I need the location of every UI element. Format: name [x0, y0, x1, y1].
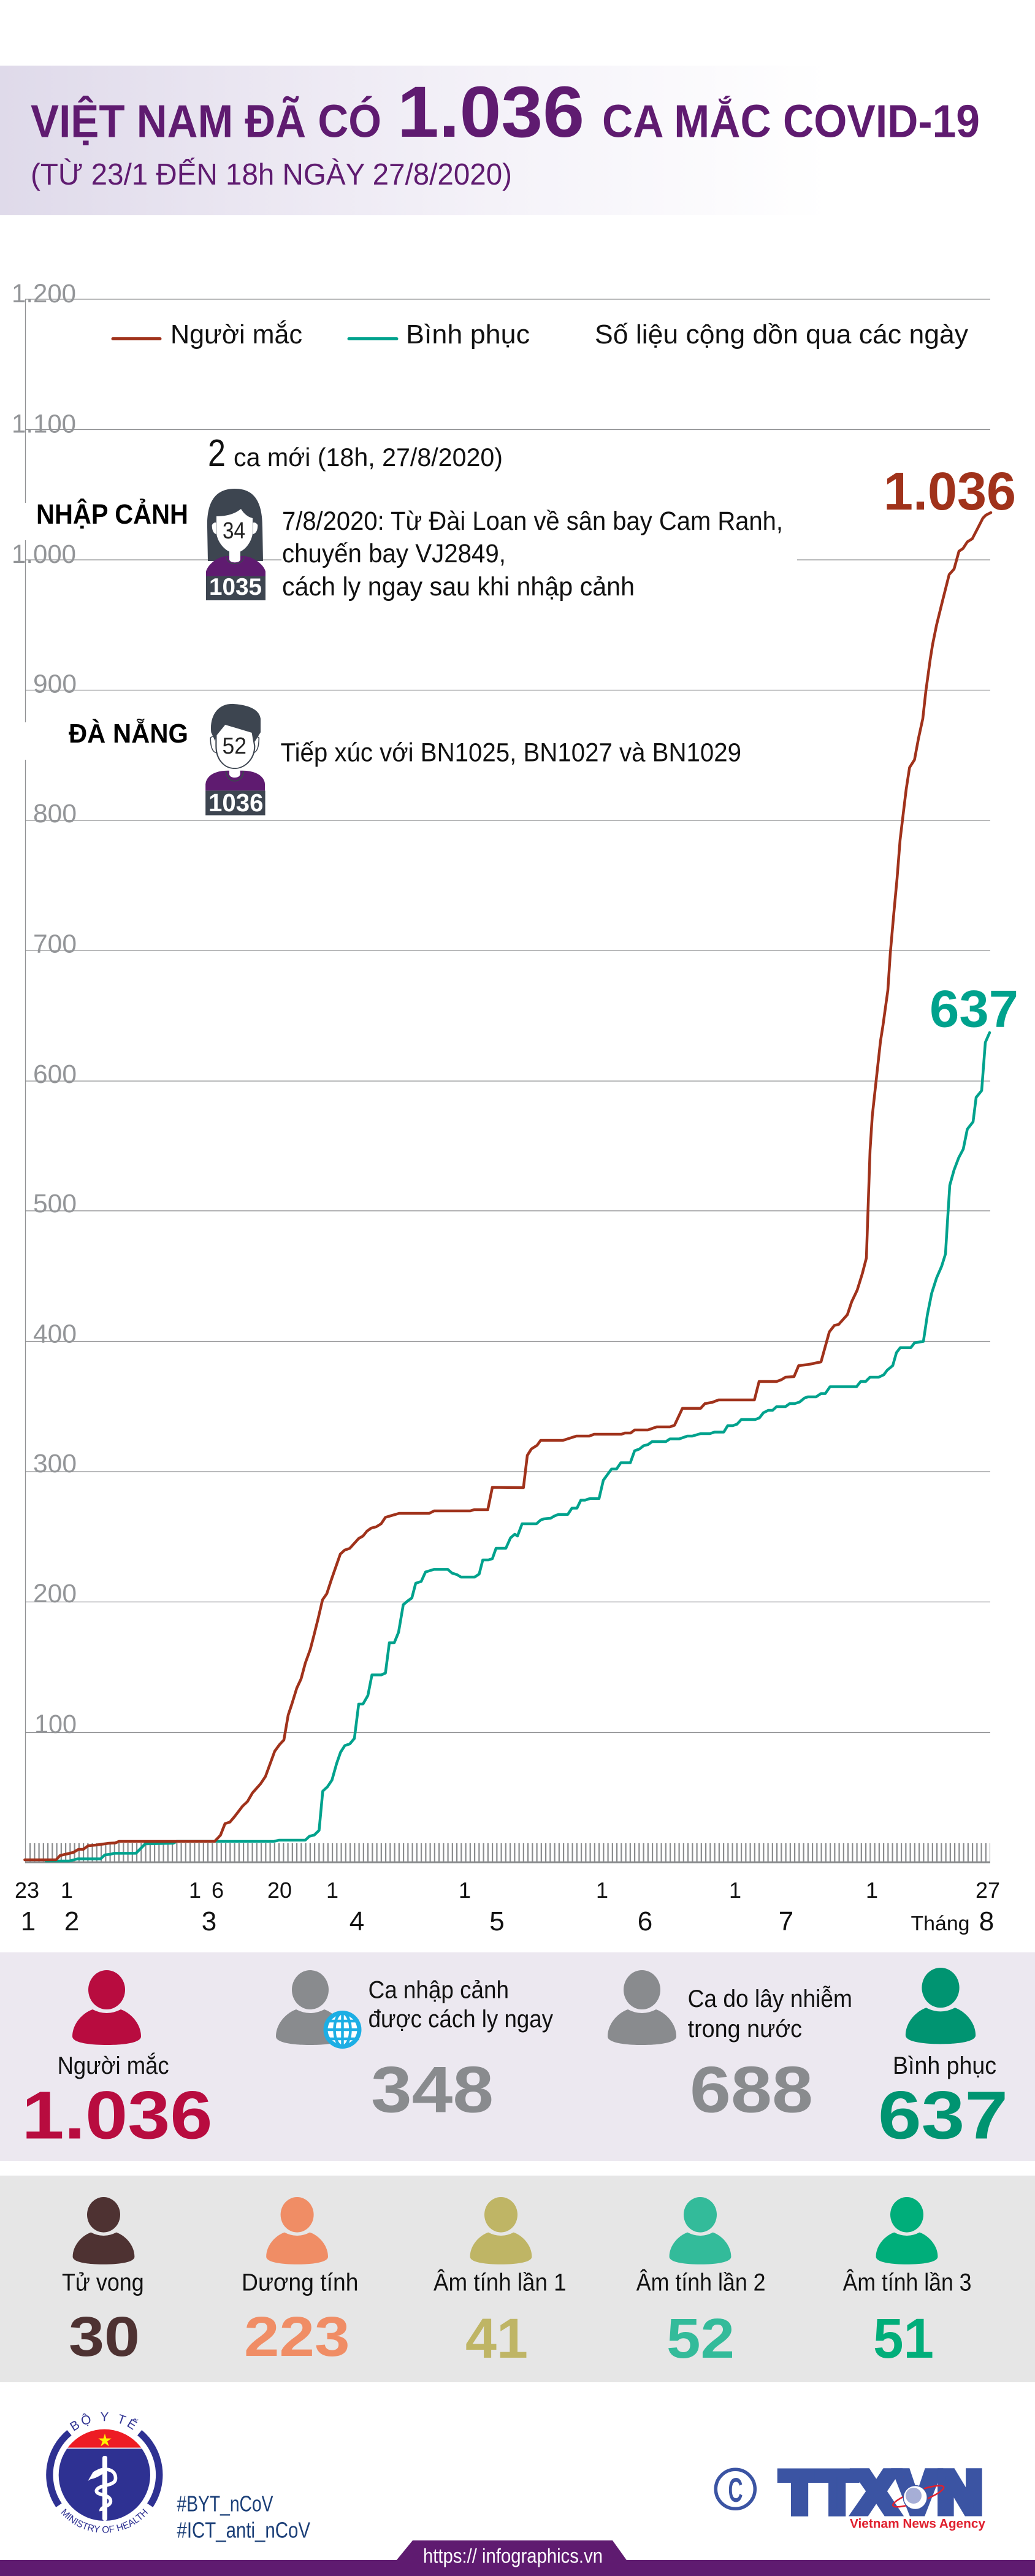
stat: recovered: [878, 1968, 1008, 2154]
y axis labels: 400: [33, 1320, 77, 1349]
stat: negative once: Âm tính lần 1: [433, 2269, 567, 2296]
x axis day labels: 23: [15, 1878, 39, 1903]
stat: confirmed: [22, 1970, 212, 2154]
stat: recovered: 637: [878, 2077, 1008, 2154]
legend: [113, 319, 968, 350]
subtitle: (TỪ 23/1 ĐẾN 18h NGÀY 27/8/2020): [31, 158, 512, 191]
new cases heading: ca mới (18h, 27/8/2020): [234, 443, 503, 472]
x axis day labels: 27: [976, 1878, 1000, 1903]
text: Da Nang case detail: Tiếp xúc với BN1025, BN1027 và BN1029: [281, 738, 741, 768]
logo: Ministry of Health: MINISTRY OF HEALTH: [61, 2509, 148, 2533]
footer bar: https:// infographics.vn: [423, 2545, 603, 2567]
stat: imported cases: [276, 1970, 553, 2127]
stat: domestic cases: [608, 1970, 852, 2127]
icon: female patient 1035: [206, 489, 265, 600]
stat: deaths: 30: [69, 2306, 140, 2368]
y axis labels: 300: [33, 1449, 77, 1478]
stat: confirmed: 1.036: [22, 2077, 212, 2154]
x axis month labels: 2: [64, 1906, 79, 1936]
stat: imported cases: 348: [371, 2053, 494, 2127]
title: VIỆT NAM ĐÃ CÓ: [31, 96, 381, 147]
logo: Ministry of Health: [46, 2412, 163, 2533]
stat: imported cases: Ca nhập cảnh: [369, 1977, 509, 2004]
icon: female patient 1035: 34: [223, 518, 245, 544]
stat: positive: [242, 2197, 358, 2368]
y axis labels: 1.000: [12, 540, 76, 569]
legend: Người mắc: [170, 319, 302, 350]
new cases heading: [208, 432, 503, 475]
y axis labels: 200: [33, 1579, 77, 1608]
x axis month labels: 5: [489, 1906, 505, 1936]
stat: positive: 223: [244, 2306, 349, 2368]
x axis month labels: 4: [349, 1906, 364, 1936]
label: NHẬP CẢNH: NHẬP CẢNH: [36, 499, 188, 530]
logo: TTXVN: Vietnam News Agency: [850, 2517, 985, 2531]
new cases heading: 2: [208, 432, 226, 475]
stat: negative twice: 52: [666, 2307, 735, 2370]
stat: negative once: [433, 2197, 567, 2370]
icon: male patient 1036: 52: [222, 733, 246, 759]
text: import case detail: cách ly ngay sau khi nhập cảnh: [282, 572, 635, 602]
x axis month labels: 8: [979, 1906, 994, 1936]
x axis month labels: 7: [779, 1906, 793, 1936]
x axis day labels: 20: [267, 1878, 292, 1903]
x axis day labels: 1: [596, 1878, 608, 1903]
value label: recovered: 637: [930, 980, 1018, 1039]
title: [31, 72, 980, 153]
hashtags: #BYT_nCoV: [177, 2491, 273, 2517]
x axis day labels: [15, 1878, 1000, 1903]
stat: negative twice: [636, 2197, 766, 2370]
stat: positive: Dương tính: [242, 2269, 358, 2296]
stat: negative three times: 51: [873, 2307, 934, 2370]
y axis labels: [12, 279, 77, 1739]
y axis labels: 600: [33, 1060, 77, 1089]
x axis month labels: [21, 1906, 994, 1936]
x axis day labels: 1: [326, 1878, 338, 1903]
icon: female patient 1035: 1035: [209, 574, 262, 600]
header band: [0, 66, 1035, 215]
x axis month labels: 6: [638, 1906, 652, 1936]
y axis labels: 800: [33, 799, 77, 828]
stat: imported cases: được cách ly ngay: [369, 2006, 553, 2033]
icon: copyright: C: [728, 2471, 743, 2509]
title: 1.036: [397, 72, 584, 153]
icon: copyright: [716, 2469, 755, 2509]
stat: domestic cases: 688: [690, 2053, 813, 2127]
recovered curve: [46, 1033, 990, 1861]
stat: confirmed: Người mắc: [58, 2052, 169, 2079]
stat: deaths: [62, 2197, 144, 2368]
title: CA MẮC COVID-19: [602, 96, 980, 147]
stat: negative three times: Âm tính lần 3: [843, 2269, 971, 2296]
legend: Số liệu cộng dồn qua các ngày: [595, 319, 968, 350]
label: ĐÀ NẴNG: ĐÀ NẴNG: [69, 718, 188, 749]
y axis labels: 500: [33, 1189, 77, 1218]
icon: male patient 1036: [205, 704, 265, 817]
x axis day labels: 1: [189, 1878, 201, 1903]
x axis month labels: 1: [21, 1906, 36, 1936]
footer bar: [0, 2540, 1035, 2576]
x axis day labels: 1: [729, 1878, 741, 1903]
panel: treatment status: [0, 2176, 1035, 2382]
stat: negative once: 41: [465, 2307, 528, 2370]
y axis labels: 900: [33, 670, 77, 699]
stat: recovered: Bình phục: [893, 2052, 996, 2079]
stat: domestic cases: trong nước: [688, 2016, 802, 2043]
x axis month labels: Tháng: [911, 1912, 970, 1935]
stat: negative twice: Âm tính lần 2: [636, 2269, 766, 2296]
stat: deaths: Tử vong: [62, 2269, 144, 2296]
confirmed curve: [25, 513, 991, 1860]
panel: summary totals: [0, 1952, 1035, 2161]
logo: TTXVN: TTXVN: [781, 2460, 982, 2525]
x axis month labels: 3: [202, 1906, 216, 1936]
line chart: [12, 279, 1018, 1936]
stat: domestic cases: Ca do lây nhiễm: [688, 1985, 852, 2012]
hashtags: [177, 2491, 310, 2542]
logo: Ministry of Health: BỘ Y TẾ: [70, 2412, 139, 2431]
text: import case detail: [282, 506, 783, 602]
text: import case detail: 7/8/2020: Từ Đài Loan về sân bay Cam Ranh,: [282, 506, 783, 536]
legend: Bình phục: [406, 319, 530, 350]
hashtags: #ICT_anti_nCoV: [177, 2518, 310, 2542]
y axis labels: 1.100: [12, 410, 76, 439]
x axis day labels: 6: [212, 1878, 224, 1903]
y axis labels: 1.200: [12, 279, 76, 308]
icon: male patient 1036: 1036: [208, 789, 264, 817]
x axis day labels: 1: [61, 1878, 73, 1903]
value label: confirmed: 1.036: [884, 462, 1016, 521]
x axis day labels: 1: [866, 1878, 878, 1903]
text: import case detail: chuyến bay VJ2849,: [282, 539, 506, 568]
x axis day labels: 1: [459, 1878, 471, 1903]
y axis labels: 100: [34, 1710, 77, 1739]
y axis labels: 700: [33, 930, 77, 959]
stat: negative three times: [843, 2197, 971, 2370]
